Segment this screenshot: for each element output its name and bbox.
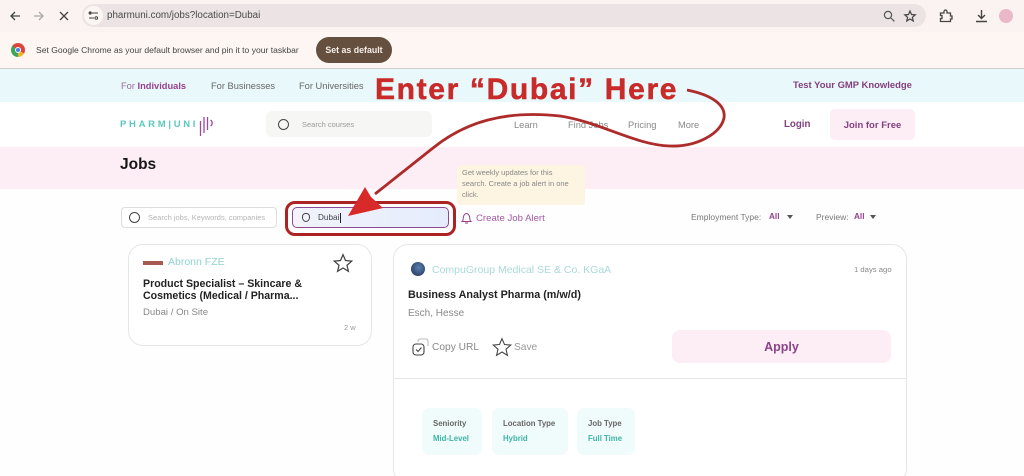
job card: abronn [128,244,372,346]
employment type filter [691,212,793,222]
tag: job type [577,408,635,455]
logo bars [200,117,213,136]
job title: Cosmetics (Medical / Pharma... [143,290,298,302]
company name: Abronn FZE [168,256,225,268]
job title [143,278,302,302]
location value: Dubai [318,213,339,222]
set as default button [316,37,392,63]
tag value: Mid-Level [433,434,469,443]
divider [394,378,906,379]
keyword search [121,207,277,228]
site navigation [0,102,1024,147]
tag: location type [492,408,568,455]
posted age: 2 w [344,323,356,332]
icon: forward arrow [34,12,44,20]
job location: Dubai / On Site [143,307,208,318]
search placeholder: Search jobs, Keywords, companies [148,213,265,222]
icon: chrome logo [11,43,25,57]
icon: star [492,337,512,356]
tag label: Job Type [588,419,622,428]
jobs heading: Jobs [120,156,156,173]
location input [292,207,449,228]
audience tab: businesses: For Businesses [211,81,275,91]
nav: pricing: Pricing [628,120,656,130]
create job alert [460,213,545,224]
infobar [0,32,1024,69]
join button: Join for Free [844,120,901,131]
audience tab: individuals: For Individuals [121,81,186,91]
icon: copy [412,338,428,356]
copy url action [412,338,479,356]
jobs header band [0,147,1024,189]
company logo [411,262,425,276]
job title: Business Analyst Pharma (m/w/d) [408,289,581,301]
tag: seniority [422,408,482,455]
nav: learn: Learn [514,120,538,130]
browser toolbar [0,0,1024,32]
apply button [672,330,891,363]
infobar message: Set Google Chrome as your default browser and pin it to your taskbar [36,45,299,55]
icon: extensions [940,9,953,22]
tag value: Full Time [588,434,622,443]
preview filter [816,212,876,222]
chrome logo center [15,47,21,53]
tag value: Hybrid [503,434,528,443]
tag label: Seniority [433,419,466,428]
save action [492,337,537,356]
audience tab: universities: For Universities [299,81,364,91]
tag label: Location Type [503,419,555,428]
icon: save star [332,253,354,272]
company name: CompuGroup Medical SE & Co. KGaA [432,264,611,276]
site top band [0,69,1024,102]
company logo [143,261,163,265]
icon: stop loading [60,12,68,20]
nav: find jobs: Find Jobs [568,120,608,130]
logo [120,117,213,136]
dropdown caret [870,215,876,219]
apply button: Apply [764,340,799,354]
filter value: All [854,212,864,221]
join button [830,109,915,140]
icon: download [976,10,987,22]
gmp link: Test Your GMP Knowledge [793,80,912,91]
icon: site settings [84,6,103,25]
icon: zoom lens [884,10,895,22]
course search [266,111,432,137]
posted age: 1 days ago [854,265,892,274]
alert label: Create Job Alert [476,213,545,224]
search icon [278,119,289,130]
job location: Esch, Hesse [408,308,464,319]
annotation heading: Enter “Dubai” Here [375,73,678,106]
url text: pharmuni.com/jobs?location=Dubai [107,10,260,21]
icon: bookmark star [903,10,917,22]
job detail panel [393,244,907,476]
login link: Login [784,119,810,130]
set as default button: Set as default [325,45,383,55]
tooltip: Get weekly updates for this [462,168,552,177]
location icon [302,213,310,222]
icon: bell [460,213,472,224]
tooltip [457,165,585,205]
filter label: Employment Type: [691,212,761,222]
icon: profile avatar [999,9,1013,23]
search icon [129,212,140,223]
text cursor [340,213,341,223]
tooltip: click. [462,190,479,199]
logo wordmark: PHARM|UNI [120,119,198,130]
address bar [82,4,926,27]
icon: back arrow [10,12,20,20]
red highlight around location input [285,201,456,236]
filter label: Preview: [816,212,849,222]
nav: more: More [678,120,699,130]
tooltip: search. Create a job alert in one [462,179,569,188]
settings glyph [88,11,98,20]
dropdown caret [787,215,793,219]
search placeholder: Search courses [302,120,354,129]
copy label: Copy URL [432,342,479,353]
job title: Product Specialist – Skincare & [143,278,302,290]
filter value: All [769,212,779,221]
save label: Save [514,342,537,353]
